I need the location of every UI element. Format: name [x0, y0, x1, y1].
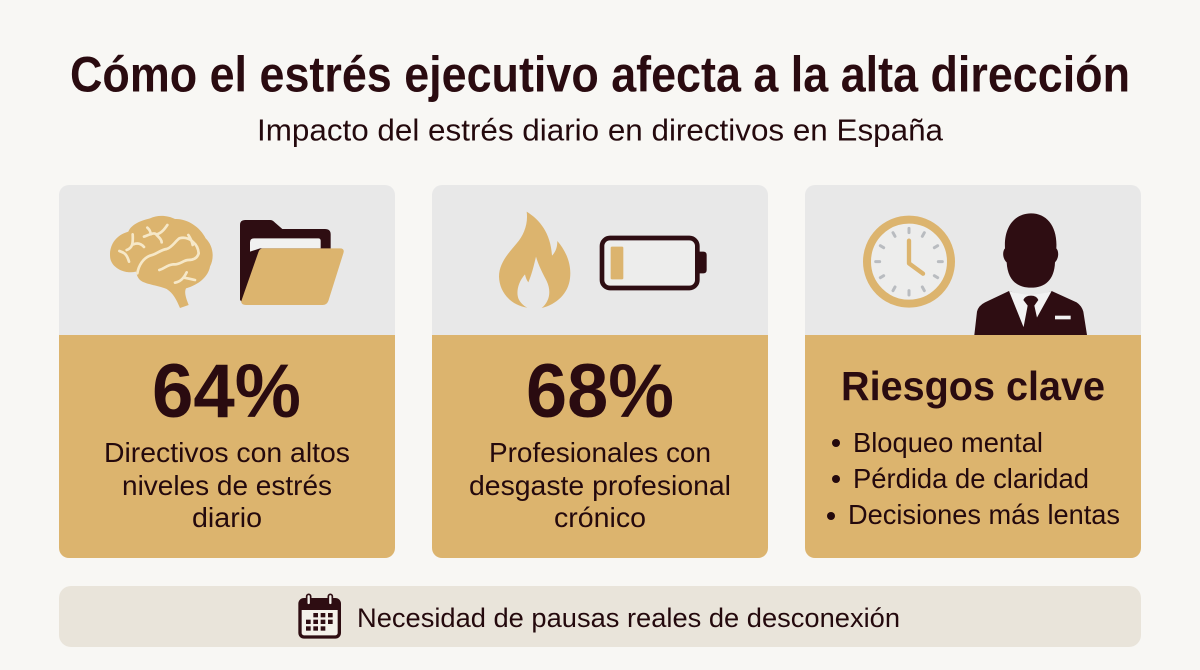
risk list [827, 427, 1120, 530]
description [104, 437, 350, 533]
panel: 68% profesionales [432, 185, 768, 558]
description [469, 437, 731, 533]
icon: clock [867, 220, 951, 304]
description: crónico [554, 502, 646, 533]
icon: battery [602, 238, 707, 288]
panel: 64% directivos [59, 185, 395, 558]
stat: 68%: 68% [526, 349, 674, 434]
banner text: Necesidad de pausas reales de desconexión [357, 603, 900, 633]
heading: riesgos clave: Riesgos clave [841, 363, 1105, 409]
icon: executive silhouette [974, 213, 1087, 335]
icon: folder [240, 220, 344, 305]
description: diario [192, 502, 262, 533]
icon: calendar [300, 594, 339, 637]
risk list: Decisiones más lentas [848, 499, 1120, 530]
stat: 64%: 64% [152, 349, 301, 434]
description: niveles de estrés [122, 470, 332, 501]
panel background [432, 185, 768, 558]
description: Profesionales con [489, 437, 711, 468]
description: desgaste profesional [469, 470, 731, 501]
panel background [805, 185, 1141, 558]
subtitle: Impacto del estrés diario en directivos en España [257, 112, 944, 148]
description: Directivos con altos [104, 437, 350, 468]
icon: flame [499, 212, 570, 308]
banner background [59, 586, 1141, 647]
icon: brain [110, 216, 213, 308]
risk list: Bloqueo mental [853, 427, 1043, 458]
footer banner [59, 586, 1141, 647]
risk list: Pérdida de claridad [853, 463, 1089, 494]
panel: riesgos clave [805, 185, 1141, 558]
panel background [59, 185, 395, 558]
